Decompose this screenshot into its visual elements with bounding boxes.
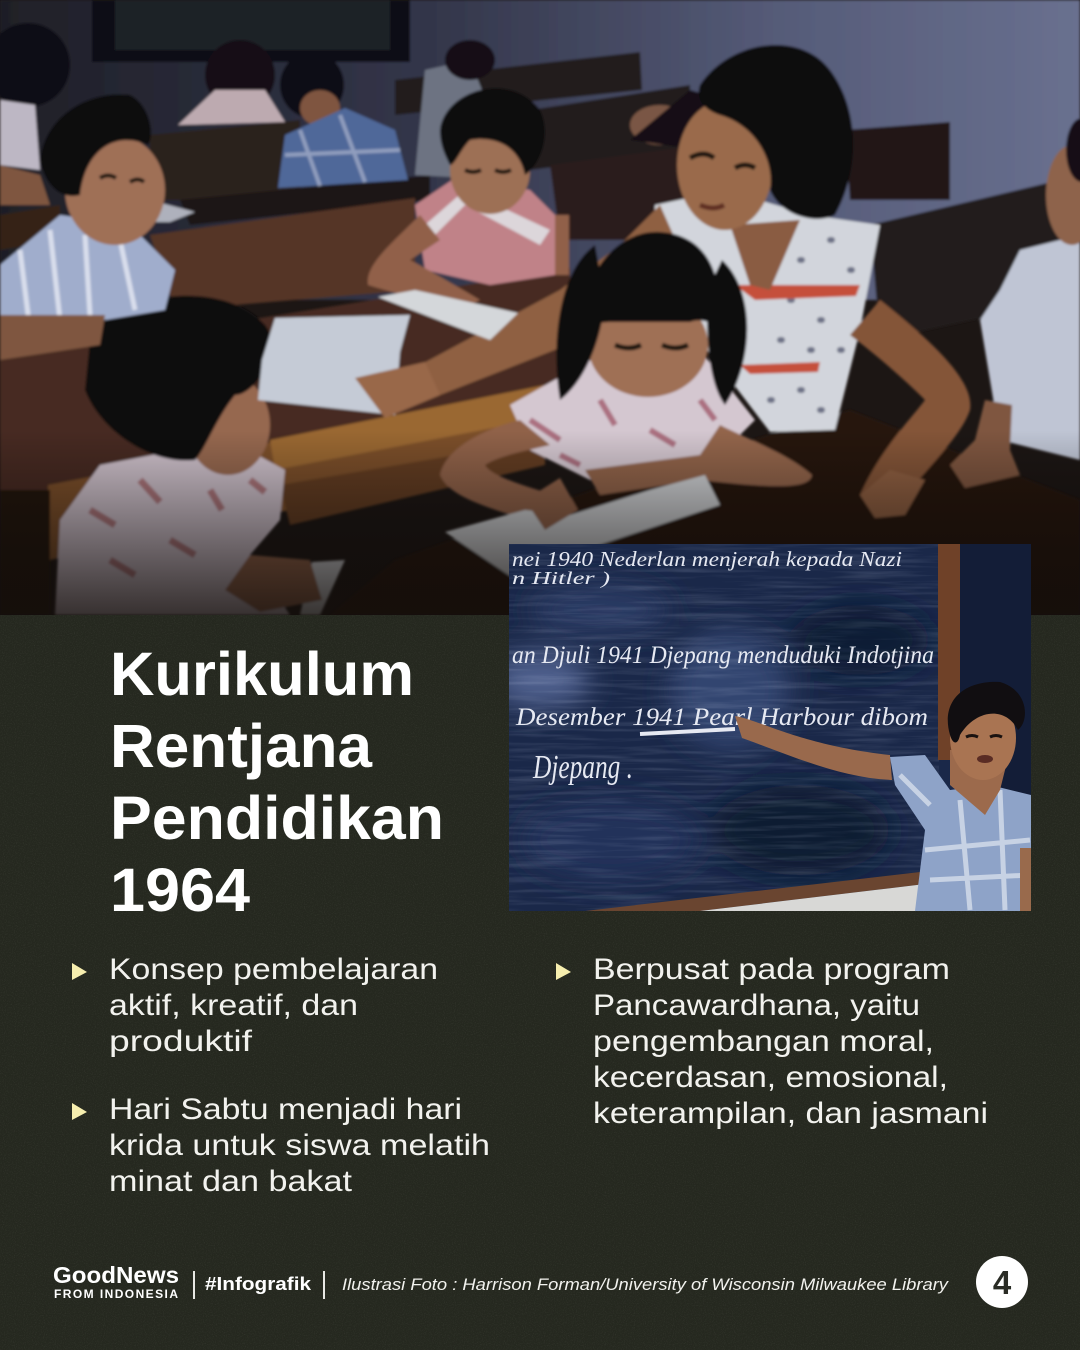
logo: GoodNews from Indonesia — [53, 1262, 179, 1301]
bullet: hari sabtu: minat dan bakat — [109, 1165, 353, 1198]
teacher — [424, 44, 972, 494]
chalk writing: an Djuli 1941 Djepang menduduki Indotjina — [512, 642, 934, 669]
icon: bullet arrow — [72, 1103, 87, 1120]
main desk — [0, 268, 570, 490]
bullet: pancawardhana: kecerdasan, emosional, — [593, 1061, 948, 1094]
bullet: pancawardhana: pengembangan moral, — [593, 1025, 934, 1058]
bullet: hari sabtu: krida untuk siswa melatih — [109, 1129, 490, 1162]
bullet: konsep pembelajaran — [72, 953, 438, 1058]
hashtag: #Infografik — [205, 1274, 312, 1294]
heading — [110, 640, 444, 924]
icon: bullet arrow — [72, 963, 87, 980]
bullet: pancawardhana: keterampilan, dan jasmani — [593, 1097, 988, 1130]
bullet: konsep pembelajaran: produktif — [109, 1025, 253, 1058]
logo: GoodNews from Indonesia: GoodNews — [53, 1262, 179, 1288]
central girl — [440, 232, 812, 525]
icon: bullet arrow — [556, 963, 571, 980]
bullet: pancawardhana: Berpusat pada program — [593, 953, 950, 986]
chalk writing: Desember 1941 Pearl Harbour dibom — [515, 704, 928, 731]
footer — [53, 1256, 1028, 1308]
chalk writing: n Hitler ) — [512, 568, 610, 589]
photo: classroom with teacher and pupils — [0, 0, 1080, 615]
photo credit: Ilustrasi Foto : Harrison Forman/University of Wisconsin Milwaukee Library — [342, 1275, 950, 1294]
left bottom girl — [55, 296, 345, 615]
middle girl — [368, 88, 569, 315]
bullet: hari sabtu: Hari Sabtu menjadi hari — [109, 1093, 462, 1126]
bullet: konsep pembelajaran: aktif, kreatif, dan — [109, 989, 358, 1022]
bullet: hari sabtu — [72, 1093, 490, 1198]
page number — [976, 1256, 1028, 1308]
bullet: pancawardhana — [556, 953, 988, 1130]
heading: Rentjana — [110, 712, 373, 780]
woman — [735, 682, 1031, 911]
heading: Pendidikan — [110, 784, 444, 852]
right side pupil — [980, 235, 1080, 460]
chalk writing — [512, 547, 934, 786]
left boy — [0, 94, 195, 360]
heading: Kurikulum — [110, 640, 414, 708]
back pupils — [204, 40, 276, 94]
page number: 4 — [993, 1264, 1012, 1301]
book on desk — [378, 290, 518, 340]
heading: 1964 — [110, 856, 250, 924]
chalk writing: Djepang . — [532, 749, 633, 786]
logo: GoodNews from Indonesia: FROM INDONESIA — [54, 1287, 178, 1301]
bullet: pancawardhana: Pancawardhana, yaitu — [593, 989, 920, 1022]
back benches — [395, 52, 642, 115]
bullet: konsep pembelajaran: Konsep pembelajaran — [109, 953, 438, 986]
chalk writing: nei 1940 Nederlan menjerah kepada Nazi — [512, 547, 902, 571]
photo: woman pointing at chalkboard — [490, 544, 1031, 911]
